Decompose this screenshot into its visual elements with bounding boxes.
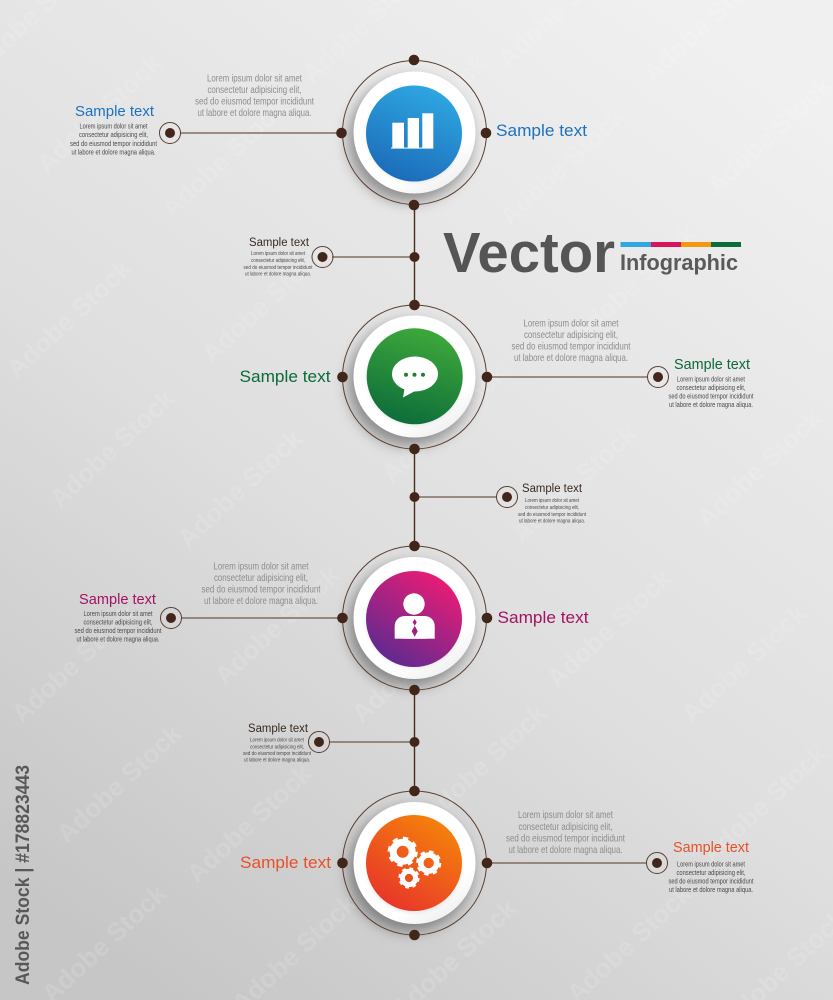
step 3 side lorem: Lorem ipsum dolor sit amet [84,609,152,618]
text block: grey lorem step 2: sed do eiusmod tempor incididunt [512,340,631,352]
callout: branch 3 text [243,723,311,764]
branch 2 lorem: ut labore et dolore magna aliqua. [519,518,585,524]
watermarks: Adobe Stock [346,598,483,729]
watermarks: Adobe Stock [31,48,168,179]
text block: grey lorem step 1: sed do eiusmod tempor incididunt [195,96,314,108]
end node step 2 [648,366,668,388]
side credit: Adobe Stock id: Adobe Stock | #178823443 [13,765,34,985]
step 1 callout line left [180,132,341,134]
step 3 side lorem: ut labore et dolore magna aliqua. [76,634,160,644]
branch 3 lorem: consectetur adipisicing elit, [250,744,304,750]
colour bar [620,242,741,247]
step 1 side lorem: Lorem ipsum dolor sit amet [80,122,148,130]
branch 2 lorem: Lorem ipsum dolor sit amet [525,498,579,504]
callout: branch 1 text [244,237,313,278]
text block: grey lorem step 1: Lorem ipsum dolor sit amet [207,72,302,84]
step 3 ring nodes [337,541,492,695]
panel: step 4 orange [337,786,647,940]
watermarks: Adobe Stock [172,423,309,554]
step 2 side lorem: Lorem ipsum dolor sit amet [677,374,745,384]
step 3 side lorem: sed do eiusmod tempor incididunt [74,626,162,635]
heading: step 2 left label: Sample text [240,367,331,386]
end node step 4 [646,852,668,874]
callout: step 2 side text [668,357,754,409]
branch 2 lorem: sed do eiusmod tempor incididunt [518,512,586,518]
title: Vector Infographic: Vector [443,221,615,285]
step 3 side lorem [74,609,162,644]
step 2 ring nodes [337,300,492,454]
branch 3 node between steps 3 and 4 [308,732,420,752]
branch 1 lorem [244,251,313,278]
panel: step 3 magenta [181,541,492,695]
branch 1 lorem: consectetur adipisicing elit, [251,258,305,264]
watermarks: Adobe Stock [416,698,553,829]
step 4 side lorem: sed do eiusmod tempor incididunt [668,876,754,886]
heading: step 4 left label: Sample text [240,853,331,872]
icon: speech bubble [392,356,438,398]
branch 1 lorem: sed do eiusmod tempor incididunt [244,265,313,271]
step 1 side lorem: ut labore et dolore magna aliqua. [72,148,156,156]
watermarks: Adobe Stock [1,253,138,384]
step 2 disc [342,305,486,449]
text block: grey lorem step 2: Lorem ipsum dolor sit amet [524,318,619,330]
callout: step 4 side text: Sample text [673,840,749,856]
branch 1 node between steps 1 and 2 [312,246,420,268]
step 1 ring nodes [336,55,491,210]
step 2 side lorem: consectetur adipisicing elit, [676,383,746,392]
branch 2 node between steps 2 and 3 [410,486,518,508]
step 4 ring nodes [337,786,492,940]
title: Vector Infographic [443,221,741,285]
step 1 side lorem: consectetur adipisicing elit, [79,130,148,139]
step 3 disc [342,546,486,690]
step 3 callout line left [181,617,342,619]
text block: grey lorem step 2: consectetur adipisicing elit, [524,329,618,341]
branch 1 lorem: ut labore et dolore magna aliqua. [245,272,311,278]
branch 2 lorem: consectetur adipisicing elit, [525,505,579,511]
watermarks: Adobe Stock [51,718,188,849]
branch 1 lorem: Lorem ipsum dolor sit amet [251,251,305,257]
text block: grey lorem step 3: ut labore et dolore magna aliqua. [204,595,318,607]
icon: bar chart [391,113,433,149]
watermarks: Adobe Stock [44,383,181,514]
watermarks: Adobe Stock [566,218,703,349]
text block: grey lorem step 3: sed do eiusmod tempor incididunt [202,584,321,596]
step 1 disc [342,60,486,204]
text block: grey lorem step 3: consectetur adipisicing elit, [214,572,308,584]
panel: step 1 blue [180,55,491,210]
text block: grey lorem step 4 [506,809,625,856]
text block: grey lorem step 4: consectetur adipisicing elit, [518,821,612,833]
step 2 side lorem: ut labore et dolore magna aliqua. [669,400,753,409]
callout: step 1 side text: Sample text [75,103,155,120]
title: Vector Infographic: Infographic [620,250,738,275]
callout: step 4 side text [668,840,754,894]
watermarks: Adobe Stock [6,598,143,729]
callout: step 2 side text: Sample text [674,357,750,373]
branch 3 lorem: sed do eiusmod tempor incididunt [243,751,311,757]
watermarks: Adobe Stock [691,403,828,534]
step 4 side lorem: Lorem ipsum dolor sit amet [677,860,745,868]
callout: step 3 side text [74,592,162,644]
step 4 callout line right [487,862,647,864]
step 4 side lorem [668,860,754,894]
callout: branch 2 text [518,483,586,524]
watermarks: Adobe Stock [376,358,513,489]
text block: grey lorem step 4: Lorem ipsum dolor sit amet [518,809,613,821]
icon: person with tie [395,593,435,639]
watermarks: Adobe Stock [676,598,813,729]
step 4 side lorem: ut labore et dolore magna aliqua. [669,885,753,894]
branch 3 lorem: Lorem ipsum dolor sit amet [250,738,304,744]
text block: grey lorem step 2 [512,318,631,364]
step 2 side lorem: sed do eiusmod tempor incididunt [668,392,754,400]
callout: branch 2 text: Sample text [522,483,583,495]
icon: gears [389,838,440,887]
step 2 side lorem [668,374,754,409]
text block: grey lorem step 1: ut labore et dolore magna aliqua. [198,107,312,119]
end node step 1 [160,122,180,144]
text block: grey lorem step 4: sed do eiusmod tempor incididunt [506,832,625,844]
vertical timeline connector [414,205,416,791]
panel: step 2 green [337,300,648,454]
callout: step 3 side text: Sample text [79,592,156,608]
watermarks: Adobe Stock [696,738,833,869]
branch 3 lorem: ut labore et dolore magna aliqua. [244,758,310,764]
text block: grey lorem step 1 [195,72,314,119]
branch 2 lorem [518,498,586,524]
text block: grey lorem step 2: ut labore et dolore magna aliqua. [514,352,628,364]
watermarks: Adobe Stock [506,418,643,549]
text block: grey lorem step 3 [202,560,321,607]
step 1 side lorem: sed do eiusmod tempor incididunt [70,139,157,148]
callout: branch 3 text: Sample text [248,723,309,735]
step 4 disc [342,791,486,935]
watermarks: Adobe Stock [181,758,318,889]
watermarks: Adobe Stock [209,560,346,691]
step 1 side lorem [70,122,157,156]
text block: grey lorem step 1: consectetur adipisicing elit, [208,84,302,96]
text block: grey lorem step 3: Lorem ipsum dolor sit amet [214,560,309,572]
text block: grey lorem step 4: ut labore et dolore magna aliqua. [508,844,622,856]
watermarks: Adobe Stock [494,101,631,232]
step 3 side lorem: consectetur adipisicing elit, [84,618,152,626]
step 2 callout line right [487,376,648,378]
callout: branch 1 text: Sample text [249,237,310,249]
watermarks: Adobe Stock [356,48,493,179]
heading: step 3 right label: Sample text [498,608,589,627]
step 4 side lorem: consectetur adipisicing elit, [676,868,746,877]
branch 3 lorem [243,738,311,764]
watermarks: Adobe Stock [541,563,678,694]
watermarks: Adobe Stock [156,93,293,224]
watermarks: Adobe Stock [196,238,333,369]
end node step 3 [160,608,182,628]
heading: step 1 right label: Sample text [496,121,587,140]
callout: step 1 side text [70,103,157,156]
